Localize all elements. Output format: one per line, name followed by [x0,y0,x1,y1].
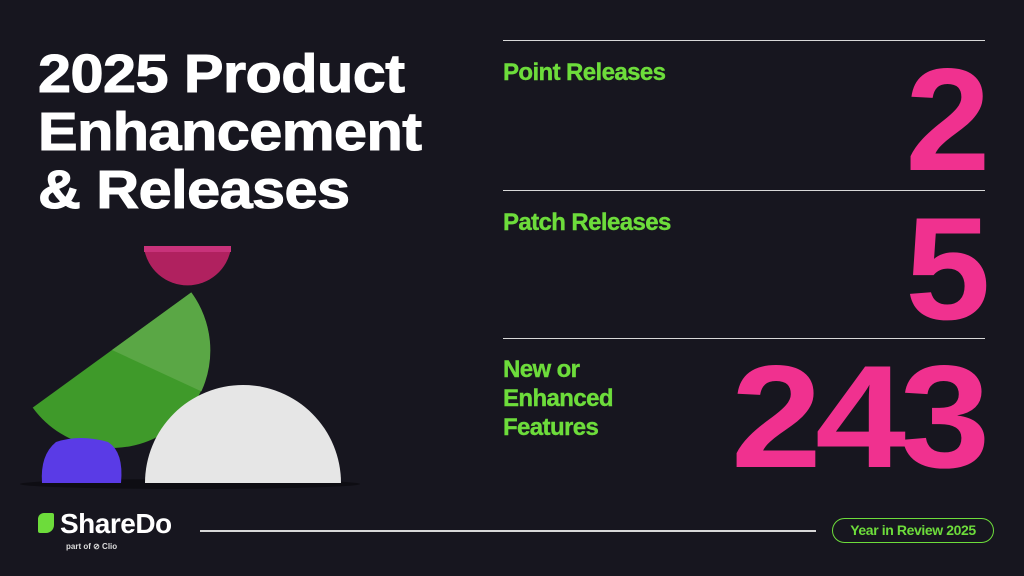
label: features: Enhanced [503,385,613,412]
number: 2: 2 [905,38,984,201]
shape: white half disc [145,385,341,483]
label: features: Features [503,414,598,441]
stat: point releases [503,38,984,201]
title [38,44,422,220]
label: features [503,356,613,441]
label: point releases: Point Releases [503,59,665,86]
badge: year in review [832,518,994,543]
shape: green half disc [33,292,249,487]
logo: ShareDo: ShareDo [60,508,172,539]
title: 2025 Product [38,44,404,104]
icon: logo mark [38,513,54,533]
badge: year in review: Year in Review 2025 [850,522,976,538]
title: & Releases [38,160,350,220]
logo: ShareDo: part of ⊘ Clio [66,542,117,551]
stat: features [503,335,984,498]
shape: blue block [42,438,121,483]
number: 243: 243 [731,335,984,498]
stat: patch releases [503,187,986,350]
label: patch releases: Patch Releases [503,209,671,236]
shape: pink bowl [144,246,231,285]
illustration: stacked shapes [20,246,360,489]
label: features: New or [503,356,579,383]
number: 5: 5 [905,187,984,350]
logo: ShareDo [38,508,172,551]
title: Enhancement [38,102,421,162]
